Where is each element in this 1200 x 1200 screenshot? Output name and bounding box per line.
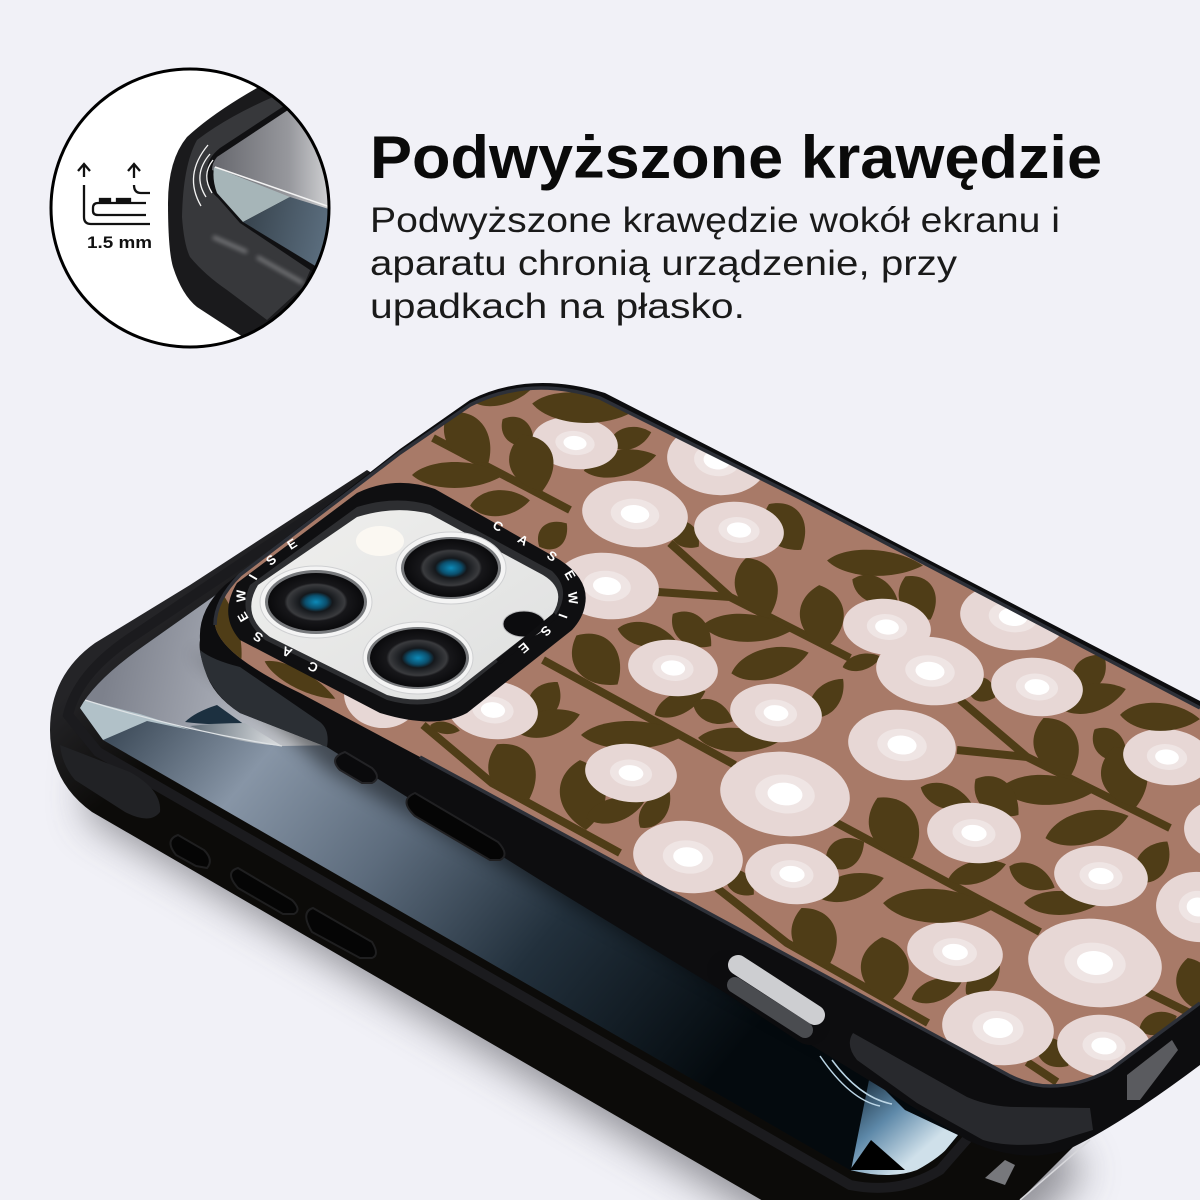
- icon: raised edge diagram: [78, 164, 150, 224]
- front phone case: [198, 370, 1200, 1156]
- screen silver reflection: [190, 723, 282, 746]
- case lower right translucent bumper: [850, 1033, 1093, 1145]
- leaves behind flowers: [198, 379, 1200, 1076]
- inset dark inner frame: [206, 106, 314, 271]
- lens left: [260, 566, 372, 638]
- CASEWISE ring lettering: E: [516, 639, 532, 657]
- back phone bumper: [60, 745, 160, 818]
- inset frame highlight: [213, 237, 303, 283]
- shadow of front phone on screen: [190, 650, 1000, 1110]
- back phone: screen side lying flat: [50, 470, 1110, 1200]
- camera inner wall: [245, 500, 563, 704]
- lens top: [396, 532, 506, 604]
- CASEWISE ring lettering: C: [305, 658, 320, 676]
- inset black case: [168, 88, 312, 336]
- CASEWISE ring lettering: S: [544, 547, 560, 565]
- back phone frame: [50, 470, 1090, 1200]
- front phone side buttons: [335, 752, 815, 1030]
- frame inner rim: [68, 490, 975, 1188]
- inset outline: [51, 69, 329, 347]
- body text: [370, 201, 1060, 326]
- plate edge highlight: [215, 388, 1200, 1086]
- case lower right speaker detail: [1127, 1040, 1178, 1100]
- back phone lower right port: [985, 1160, 1015, 1185]
- camera ring: [228, 483, 586, 722]
- inset screen grey: [212, 110, 332, 212]
- phone drop shadow: [86, 722, 1086, 1200]
- leaves over flowers: [501, 389, 1200, 926]
- body text: Podwyższone krawędzie wokół ekranu i: [370, 201, 1060, 240]
- screen sky: [85, 595, 322, 746]
- CASEWISE ring lettering: W: [234, 589, 248, 602]
- body text: upadkach na płasko.: [370, 287, 745, 326]
- screen dark swoosh: [185, 705, 245, 725]
- inset translucent frame band: [182, 98, 310, 320]
- screen black triangle: [850, 1140, 905, 1170]
- CASEWISE ring lettering: E: [284, 535, 300, 553]
- stems: [423, 438, 1200, 1082]
- CASEWISE ring lettering: I: [555, 612, 571, 620]
- screen pale stripe: [78, 700, 190, 740]
- flash: [356, 526, 404, 556]
- inset screen dark: [243, 197, 332, 268]
- camera plate: [251, 510, 558, 700]
- silver port: [727, 965, 815, 1030]
- back phone screen: [80, 594, 958, 1175]
- CASEWISE ring lettering: S: [537, 623, 554, 640]
- case outer frame: [200, 383, 1200, 1156]
- back phone side buttons: [170, 835, 376, 958]
- CASEWISE ring lettering: A: [279, 643, 294, 661]
- inset screen pale: [213, 167, 290, 222]
- CASEWISE ring lettering: W: [565, 591, 581, 605]
- screen bottom glow: [850, 1075, 958, 1175]
- CASEWISE ring lettering: [234, 517, 581, 676]
- mute slot: [335, 752, 377, 783]
- flowers: [341, 413, 1200, 1082]
- circular detail inset: [51, 69, 340, 347]
- ring overlap near mic: [498, 615, 556, 662]
- inset white disc: [51, 69, 329, 347]
- CASEWISE ring lettering: S: [250, 628, 266, 646]
- CASEWISE ring lettering: I: [246, 572, 260, 582]
- CASEWISE ring lettering: E: [234, 609, 252, 625]
- side button: [406, 793, 505, 860]
- camera module: [228, 483, 586, 722]
- inset label: 1.5 mm: 1.5 mm: [87, 233, 152, 252]
- inset phone corner photo: [168, 88, 340, 340]
- glow arcs: [820, 1056, 892, 1106]
- case left translucent bumper: [200, 650, 328, 747]
- inset impact arcs: [193, 145, 213, 206]
- title: Podwyższone krawędzie: [370, 124, 1102, 191]
- microphone hole: [503, 611, 545, 637]
- CASEWISE ring lettering: C: [490, 517, 506, 535]
- lens bottom: [363, 622, 473, 694]
- body text: aparatu chronią urządzenie, przy: [370, 244, 958, 283]
- CASEWISE ring lettering: A: [515, 531, 531, 549]
- white horizon line: [85, 700, 282, 746]
- patterned back plate: [198, 370, 1200, 1100]
- inset white horizon line: [215, 167, 330, 207]
- CASEWISE ring lettering: S: [263, 551, 279, 569]
- CASEWISE ring lettering: E: [561, 567, 579, 583]
